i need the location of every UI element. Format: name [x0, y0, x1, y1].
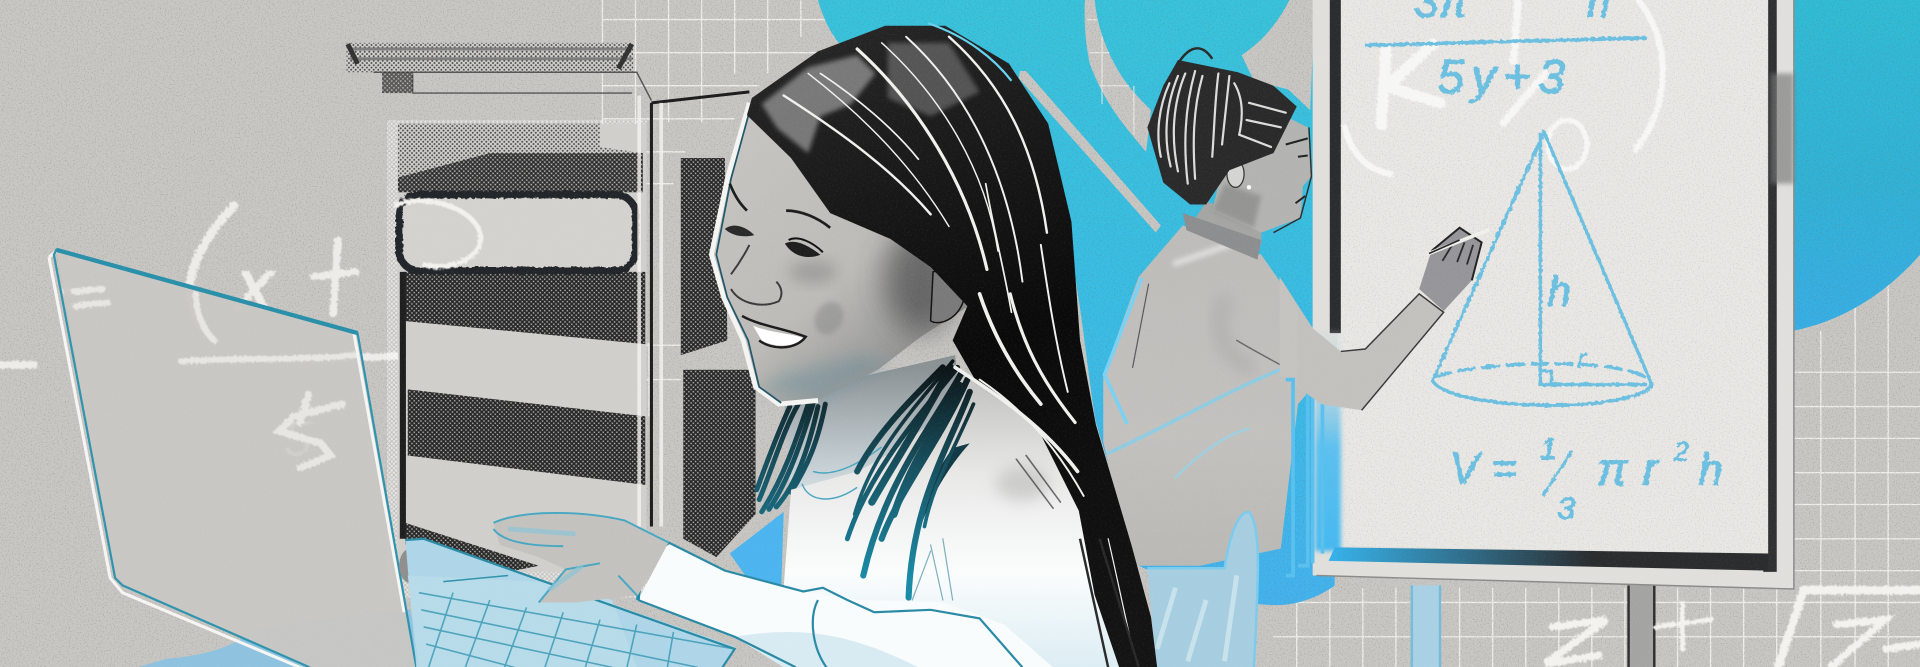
- girl face: [711, 73, 980, 404]
- board outer frame: [1313, 0, 1794, 589]
- volume formula: πr: [1597, 443, 1660, 495]
- hair blue edge: [928, 23, 1011, 81]
- chalk: plus: [313, 240, 355, 313]
- girl sweater shading: [912, 443, 1060, 600]
- chalk: closing parenthesis and stroke: [448, 206, 577, 404]
- volume formula: h: [1698, 446, 1723, 495]
- laptop: [49, 250, 735, 667]
- teacher face: [1212, 110, 1311, 233]
- desk mat: light blue: [137, 610, 422, 667]
- board fraction bar: [1365, 38, 1647, 45]
- laptop screen: [56, 251, 416, 667]
- girl sweater body: [784, 380, 1119, 667]
- girl left hair strands: [757, 404, 825, 512]
- teacher arm and sleeve: [1280, 277, 1444, 410]
- chalk: root sign: [1778, 590, 1920, 667]
- cabinet lit backing: [387, 120, 647, 598]
- volume formula: [1450, 433, 1723, 526]
- sleeve outline: [638, 542, 1022, 667]
- grid on cut-outs: [1087, 20, 1134, 135]
- chalk ghost through screen: [73, 289, 355, 468]
- right leg: [1629, 585, 1654, 667]
- eye shadow: [789, 261, 838, 283]
- cabinet top shelf: [347, 43, 651, 100]
- cone h label: h: [1548, 268, 1571, 315]
- cabinet left upright: [400, 272, 405, 539]
- cabinet handle chalk ghost: [394, 201, 481, 266]
- face jaw teal tint: [759, 355, 894, 400]
- board inner left border: [1330, 0, 1341, 333]
- girl: [493, 23, 1157, 667]
- face outline: [711, 103, 818, 404]
- teacher neck: [1194, 202, 1261, 245]
- board denominator: 5y+3: [1438, 51, 1565, 104]
- laptop keyboard: [405, 539, 735, 667]
- cabinet: halftone shelving: [347, 43, 756, 598]
- blue patch behind arm: [730, 512, 784, 588]
- background: right blue circle: [1794, 0, 1920, 331]
- board chalk ghost marks: [1344, 0, 1663, 174]
- cabinet dark band two: [403, 272, 645, 344]
- left leg: [1412, 585, 1440, 667]
- hair grey sheen: [762, 43, 980, 153]
- cheek blush: [809, 297, 849, 340]
- teacher collar: [1183, 213, 1261, 260]
- teacher torso shading: [1104, 245, 1308, 478]
- girl hair: [747, 23, 1157, 667]
- chalk: plus: [1656, 602, 1712, 649]
- background: central blue blob: [818, 0, 1335, 605]
- whiteboard: [1286, 0, 1794, 589]
- teacher torso: [1103, 225, 1341, 566]
- chalk: opening parenthesis: [190, 206, 234, 340]
- girl sweater neckline: [802, 447, 882, 499]
- background: grey cut-outs inside blob: [1019, 0, 1315, 233]
- teacher: [1103, 48, 1444, 566]
- whiteboard stand legs: [1412, 585, 1654, 667]
- chalk: x: x: [235, 247, 275, 324]
- teacher chair: pale blue: [1147, 512, 1258, 667]
- board inner bottom border: [1329, 547, 1768, 571]
- mouth: [742, 316, 806, 347]
- cabinet door frame: [651, 92, 749, 527]
- teacher hair: [1147, 48, 1297, 204]
- girl ear: [931, 271, 964, 323]
- chalk: z under root: [1831, 620, 1920, 667]
- hair lower dark strand: [1080, 539, 1139, 667]
- right eye: [785, 242, 820, 257]
- volume formula: 1: [1540, 433, 1557, 466]
- sleeve cuff: [638, 542, 669, 600]
- cabinet dark band one: [398, 124, 643, 192]
- cabinet rounded handle: [399, 195, 636, 271]
- cone diagram: [1433, 132, 1652, 405]
- cone r label: r: [1577, 343, 1587, 373]
- girl neck: [784, 355, 967, 502]
- girl sleeve: [638, 542, 1053, 667]
- board formula group: [1365, 0, 1723, 526]
- left eye: [725, 226, 754, 236]
- laptop hinge dot: [399, 549, 421, 583]
- cabinet dark band four: [405, 523, 539, 571]
- board inner right border: [1763, 0, 1777, 572]
- volume formula: 2: [1673, 436, 1689, 466]
- chalk: equals sign: [66, 289, 108, 306]
- volume formula: V =: [1450, 445, 1517, 494]
- volume formula: 3: [1558, 490, 1576, 526]
- bottom right chalk maths: [1545, 590, 1920, 667]
- board inner left border in blue: [1315, 331, 1341, 551]
- hair highlights: [784, 37, 1133, 649]
- chalk: left dash: [0, 362, 34, 368]
- background chalk maths: [0, 206, 577, 404]
- chalk: fraction bar: [181, 343, 508, 361]
- teacher forearm over board: [1298, 228, 1488, 410]
- laptop teal outline: [54, 250, 416, 667]
- cabinet dark band three: [408, 389, 645, 485]
- face cheek shadow: [884, 225, 958, 333]
- girl front hair strands: [847, 361, 973, 598]
- brows: [730, 184, 830, 228]
- background: white grid paper: [600, 0, 1920, 667]
- chalk ghost through screen: 5: [284, 413, 312, 467]
- nose: [731, 245, 781, 305]
- laptop white outline: [49, 251, 404, 667]
- board surface: [1337, 0, 1768, 553]
- cabinet side panel dark two: [683, 370, 756, 557]
- girl hand on keyboard: [493, 513, 669, 602]
- cabinet side panel dark one: [681, 158, 727, 355]
- chalk: letter z: [1545, 620, 1607, 664]
